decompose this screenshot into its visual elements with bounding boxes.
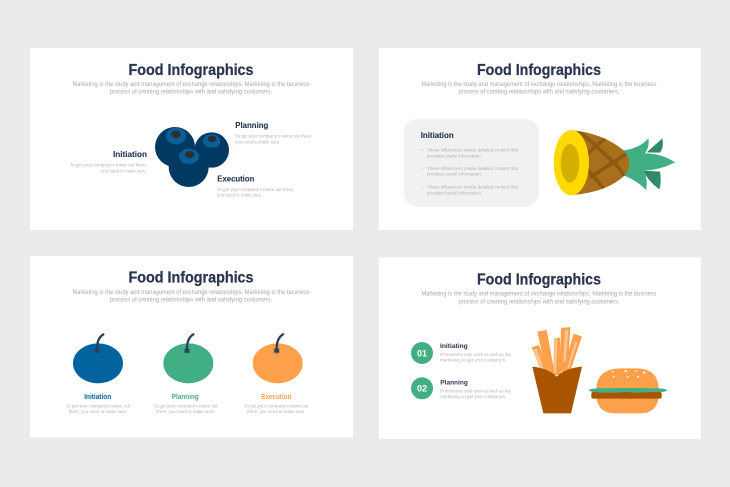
intro text: tomatoes panel	[72, 289, 310, 303]
bullet list: These influencers create detailed content that	[427, 166, 519, 171]
label: execution: To get your company's name out	[244, 403, 309, 408]
label: initiation: To get your company's name out	[66, 403, 131, 408]
label: initiation: there, you need to make sure.	[69, 409, 127, 414]
step 02: marketing, to get your company's.	[440, 394, 506, 399]
heading: pineapple panel: Food Infographics	[477, 62, 601, 79]
bullet list: provides useful information.	[427, 172, 482, 177]
heading: fast food panel: Food Infographics	[477, 272, 601, 288]
label: initiation: you need to make sure.	[101, 168, 147, 173]
label: initiation	[70, 149, 147, 173]
bullet list: provides useful information.	[427, 153, 482, 158]
label: execution: there, you need to make sure.	[247, 409, 306, 414]
icon: burger	[588, 368, 667, 413]
intro text: blueberries panel	[72, 81, 310, 96]
step 02: 02	[417, 384, 427, 394]
step 02	[411, 377, 511, 399]
label: initiation: To get your company's name out there,	[70, 163, 147, 168]
content card	[404, 119, 539, 207]
heading: blueberries panel: Food Infographics	[128, 62, 254, 79]
card heading: Initiation	[421, 130, 454, 140]
bullet list: These influencers create detailed content that	[427, 185, 519, 190]
label: planning	[235, 120, 312, 144]
icon: blueberries	[155, 127, 229, 187]
label: execution: Execution	[261, 394, 291, 401]
intro text: fast food panel	[422, 291, 656, 305]
step 02: Planning	[440, 380, 468, 386]
bullet list: These influencers create detailed content that	[427, 147, 519, 152]
intro text: tomatoes panel: Marketing is the study and management of exchange relationships. Marketing is the business	[72, 289, 310, 296]
panel: pineapple	[379, 48, 701, 230]
icon: french fries	[532, 327, 582, 413]
label: initiation	[66, 394, 131, 414]
icon: pineapple	[554, 130, 675, 195]
icon: green fruit	[163, 334, 213, 383]
intro text: pineapple panel: process of creating relationships with and satisfying customers.	[458, 88, 620, 96]
panel: fries and burger	[379, 257, 701, 439]
label: initiation: Initiation	[84, 394, 111, 401]
intro text: fast food panel: process of creating relationships with and satisfying customers.	[458, 298, 620, 305]
step 01: Initiating	[440, 343, 468, 350]
intro text: tomatoes panel: process of creating relationships with and satisfying customers.	[110, 296, 272, 303]
step 01: marketing, to get your company's.	[440, 358, 506, 363]
label: execution	[244, 394, 309, 414]
intro text: pineapple panel	[422, 81, 656, 96]
intro text: fast food panel: Marketing is the study and management of exchange relationships. Marketing is the business	[422, 291, 656, 298]
label: planning: Planning	[172, 394, 199, 401]
label: initiation: Initiation	[113, 149, 147, 159]
intro text: pineapple panel: Marketing is the study and management of exchange relationships. Marketing is the business	[422, 81, 656, 88]
label: execution	[217, 174, 294, 198]
label: planning: you need to make sure.	[235, 139, 280, 144]
icon: blue fruit	[73, 334, 123, 383]
label: planning: To get your company's name out there,	[235, 134, 312, 139]
label: execution: To get your company's name out there,	[217, 187, 294, 192]
intro text: blueberries panel: Marketing is the study and management of exchange relationships. Marketing is the business	[72, 81, 310, 88]
panel: tomatoes	[30, 256, 353, 438]
step 01: Promotions only work as well as the	[440, 352, 511, 357]
step 02: Promotions only work as well as the	[440, 388, 511, 393]
label: planning: Planning	[235, 120, 268, 130]
heading: tomatoes panel: Food Infographics	[128, 270, 254, 287]
bullet list	[421, 147, 519, 195]
label: planning	[154, 394, 218, 414]
panel: blueberries	[30, 48, 353, 230]
label: execution: you need to make sure.	[217, 193, 262, 198]
step 01: 01	[417, 348, 427, 358]
step 01	[411, 342, 511, 364]
icon: orange fruit	[253, 334, 303, 383]
label: planning: To get your company's name out	[154, 403, 218, 408]
bullet list: provides useful information.	[427, 190, 482, 195]
intro text: blueberries panel: process of creating relationships with and satisfying customers.	[110, 88, 272, 96]
label: execution: Execution	[217, 174, 254, 184]
label: planning: there, you need to make sure.	[156, 409, 215, 414]
